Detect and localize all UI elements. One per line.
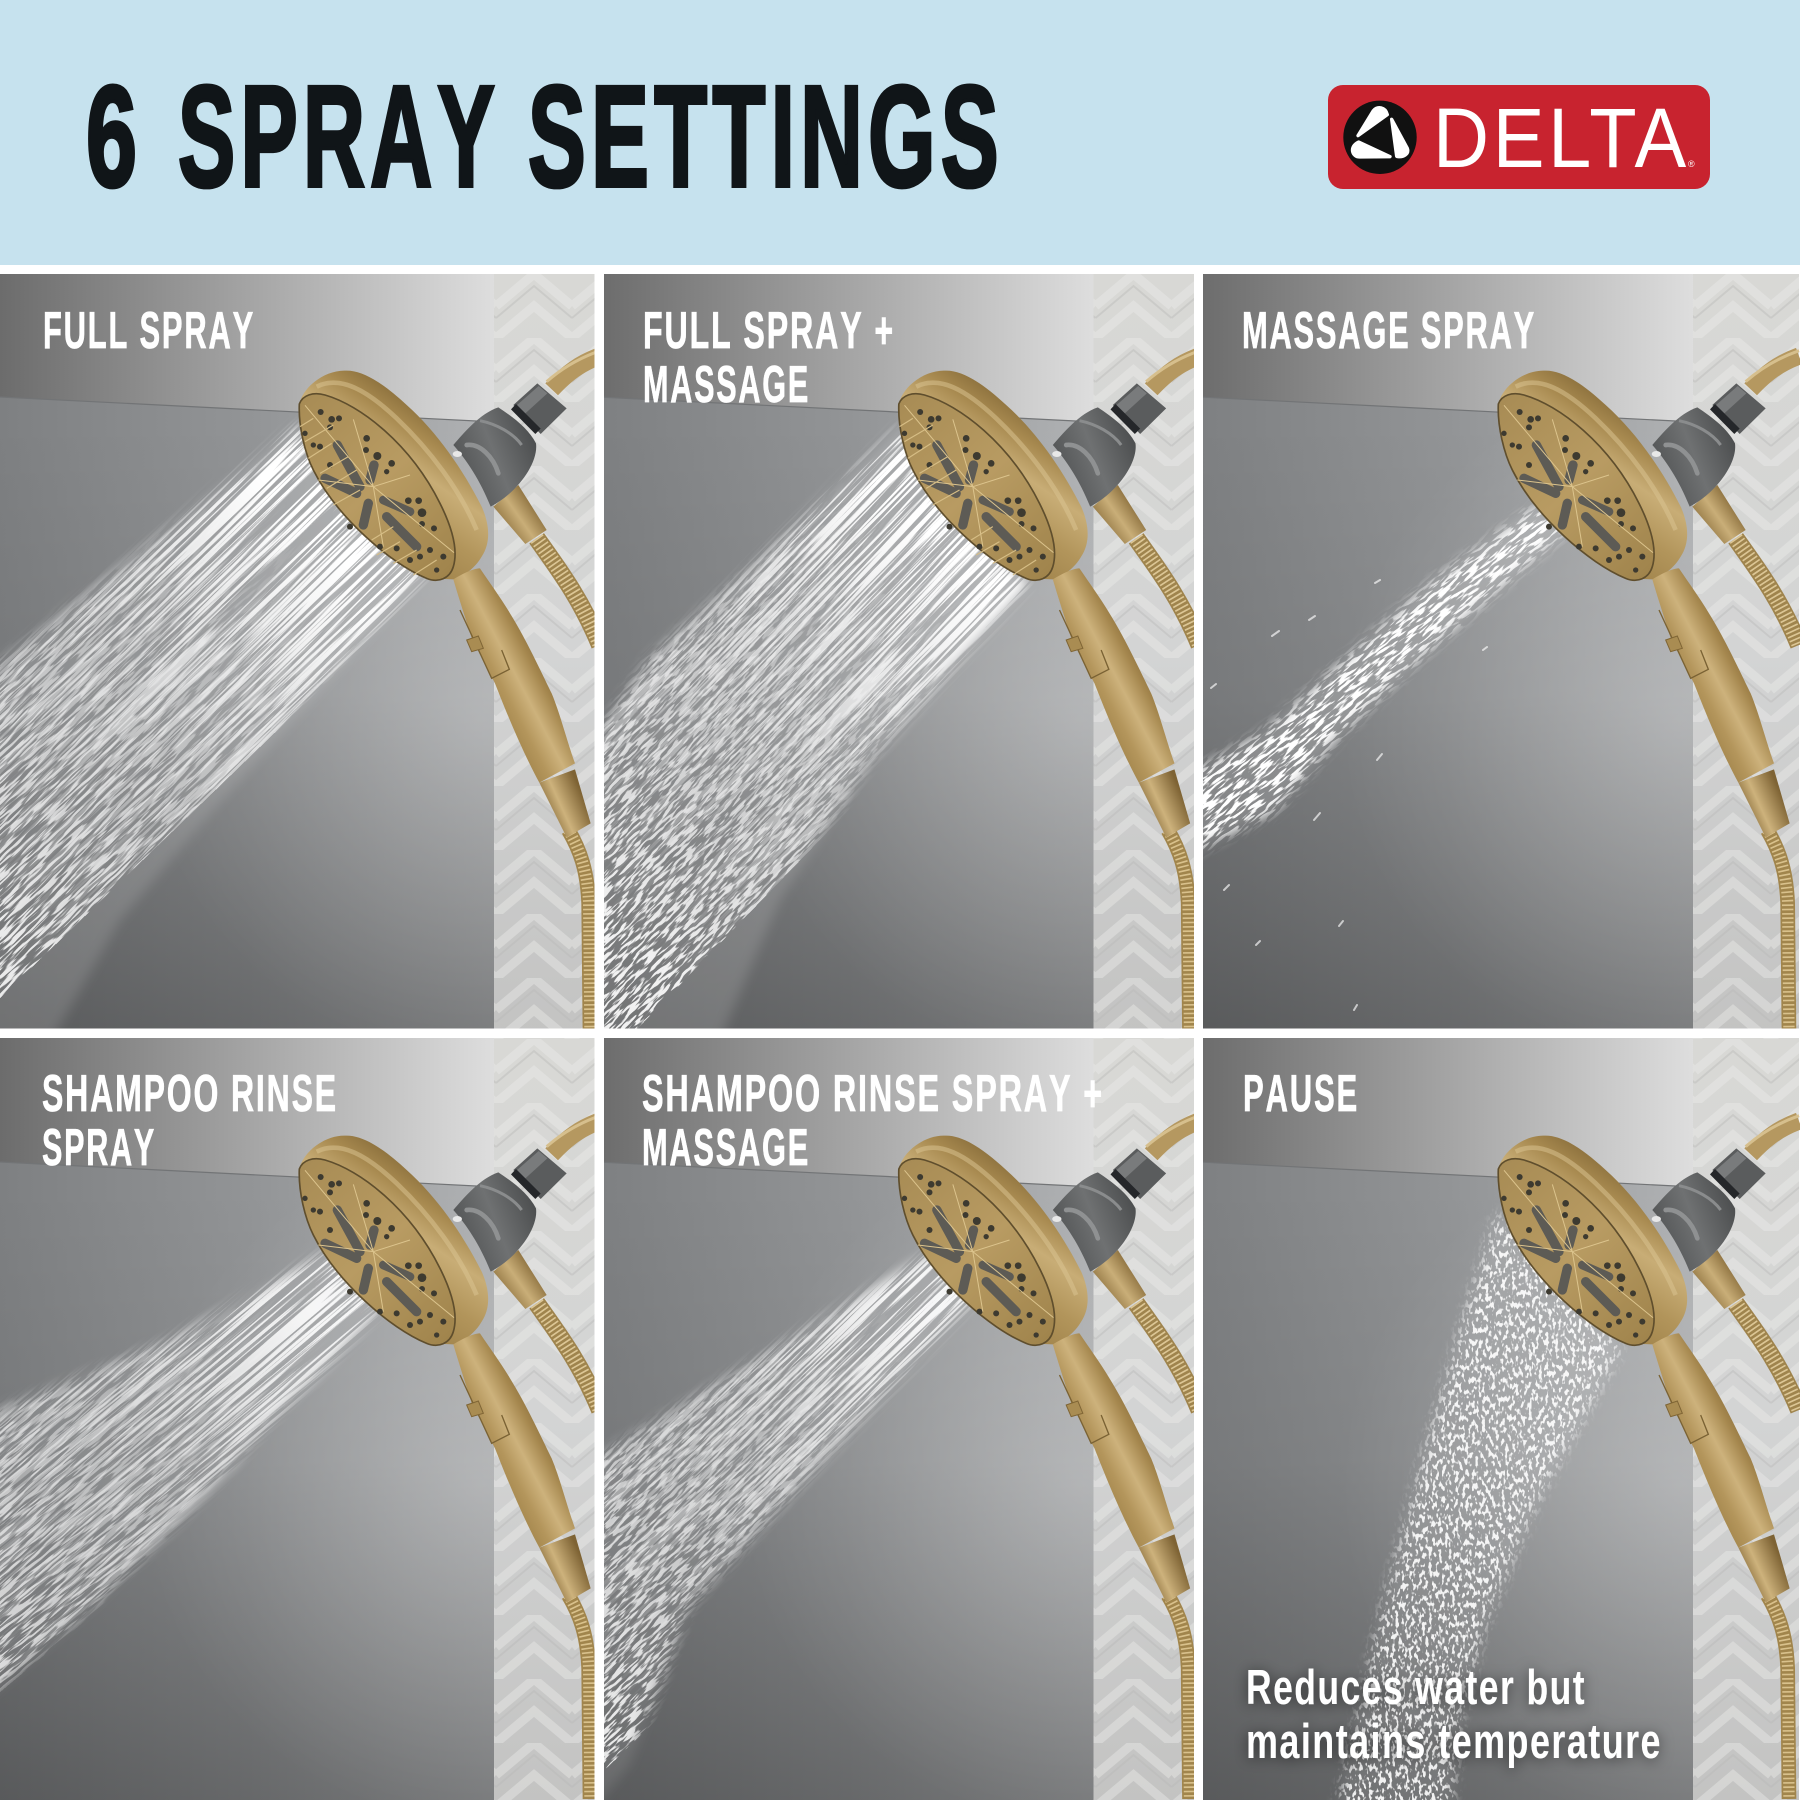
label: shampoo rinse spray: SHAMPOO RINSE <box>42 1065 338 1123</box>
label: shampoo rinse spray <box>42 1065 338 1177</box>
label: full spray + massage: FULL SPRAY + <box>643 302 895 360</box>
callout: reduces water: Reduces water but <box>1246 1661 1586 1715</box>
title: SPRAY <box>178 56 500 217</box>
spray: shampoo rinse + massage <box>404 1151 1084 1800</box>
panel: shampoo rinse spray + massage <box>404 1035 1200 1800</box>
photo group <box>1025 270 1799 1035</box>
spray: full <box>0 420 427 1028</box>
shower head <box>299 351 600 1034</box>
logo: Delta <box>1328 85 1710 189</box>
callout: reduces water <box>1246 1661 1662 1769</box>
shower head <box>899 1116 1199 1799</box>
label: full spray: FULL SPRAY <box>43 302 255 360</box>
panel: massage spray <box>1203 274 1800 1028</box>
shower head <box>899 351 1199 1034</box>
logo: Delta: DELTA <box>1433 91 1690 185</box>
label: shampoo rinse spray + massage: MASSAGE <box>642 1119 810 1177</box>
stray droplets <box>1211 580 1487 1010</box>
title: 6 <box>86 56 137 217</box>
shower head <box>1498 351 1799 1034</box>
photo group <box>404 1035 1200 1800</box>
label: shampoo rinse spray + massage: SHAMPOO RINSE SPRAY + <box>642 1065 1104 1123</box>
panel: shampoo rinse spray <box>0 1035 600 1800</box>
panel: full spray + massage <box>604 274 1194 1028</box>
spray: full + massage <box>604 423 1032 1028</box>
spray: massage <box>1025 400 1683 998</box>
label: full spray + massage <box>644 311 892 403</box>
title <box>86 56 1004 217</box>
label: full spray + massage: MASSAGE <box>643 356 810 414</box>
spray: shampoo rinse <box>0 1146 480 1800</box>
spray: pause droplets <box>1299 1165 1699 1800</box>
label: massage spray: MASSAGE SPRAY <box>1242 302 1536 360</box>
shower head <box>1498 1116 1799 1799</box>
panel: full spray <box>0 274 594 1028</box>
photo group <box>0 1035 600 1800</box>
shower head <box>299 1116 600 1799</box>
label: shampoo rinse spray + massage <box>642 1065 1104 1177</box>
title: SETTINGS <box>528 56 1004 217</box>
photo group <box>1199 1035 1799 1800</box>
photo group <box>604 274 1194 1028</box>
gold needles <box>300 418 437 575</box>
label: pause: PAUSE <box>1243 1065 1359 1123</box>
label: shampoo rinse spray: SPRAY <box>42 1119 156 1177</box>
logo: Delta: ® <box>1688 159 1695 169</box>
gold needles <box>899 418 1036 575</box>
callout: reduces water: maintains temperature <box>1246 1715 1662 1769</box>
header band <box>0 0 1800 265</box>
panel: pause <box>1199 1035 1799 1800</box>
